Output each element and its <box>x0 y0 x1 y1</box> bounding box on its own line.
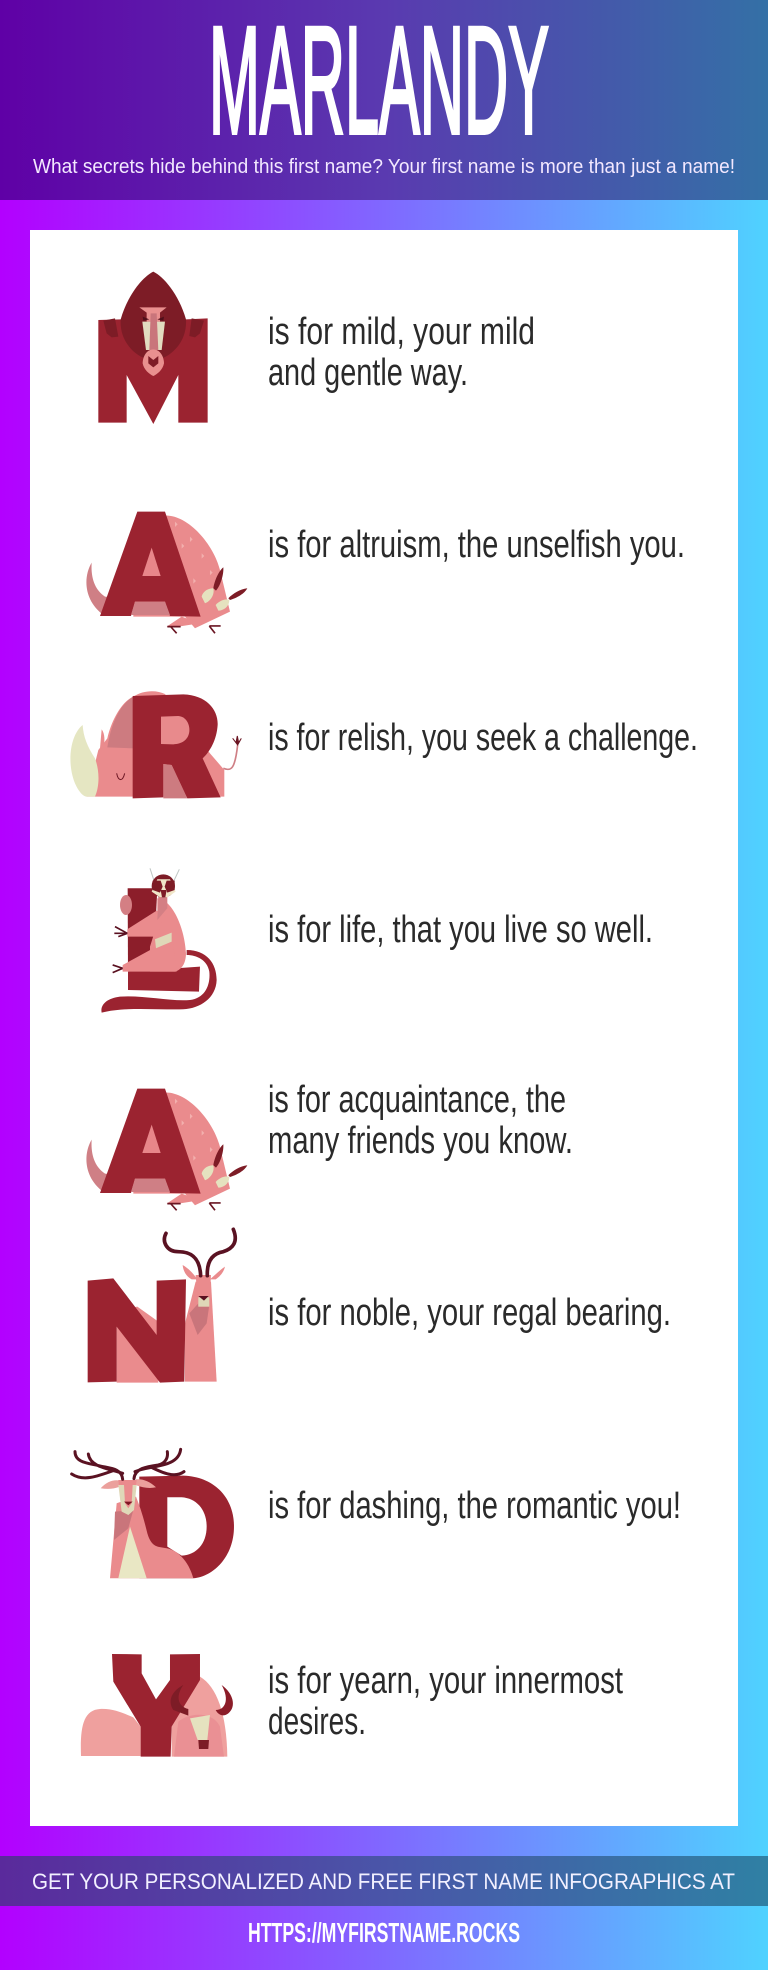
text <box>268 1079 573 1162</box>
row: M <box>98 272 535 424</box>
icon: rhino letter R <box>70 691 241 798</box>
footer band <box>0 1856 768 1906</box>
footer url: HTTPS://MYFIRSTNAME.ROCKS <box>248 1917 520 1948</box>
text: is for life, that you live so well. <box>268 909 653 951</box>
icon: mandrill letter M <box>98 272 208 424</box>
icon: yak letter Y <box>81 1654 233 1757</box>
icon: deer letter D <box>72 1449 234 1578</box>
row: D <box>72 1449 681 1578</box>
icon: lemur letter L <box>101 868 217 1013</box>
text: desires. <box>268 1701 366 1743</box>
text: is for acquaintance, the <box>268 1079 566 1121</box>
icon: armadillo letter A <box>86 512 247 633</box>
row: L <box>101 868 653 1013</box>
header band <box>0 0 768 200</box>
row: A (second) <box>86 1079 573 1210</box>
subtitle: What secrets hide behind this first name? Your first name is more than just a name! <box>33 156 735 178</box>
icon: antelope letter N <box>88 1229 235 1383</box>
row: R <box>70 691 698 798</box>
text: is for mild, your mild <box>268 311 535 353</box>
row: A <box>86 512 685 633</box>
icon: armadillo letter A <box>86 1089 247 1210</box>
row: Y <box>81 1654 623 1757</box>
text: many friends you know. <box>268 1120 573 1162</box>
text <box>268 1660 623 1743</box>
row: N <box>88 1229 671 1383</box>
text: and gentle way. <box>268 352 468 394</box>
text: is for yearn, your innermost <box>268 1660 623 1702</box>
footer call to action: GET YOUR PERSONALIZED AND FREE FIRST NAME INFOGRAPHICS AT <box>32 1869 735 1894</box>
panel: white letters card <box>30 230 738 1826</box>
text <box>268 311 535 394</box>
